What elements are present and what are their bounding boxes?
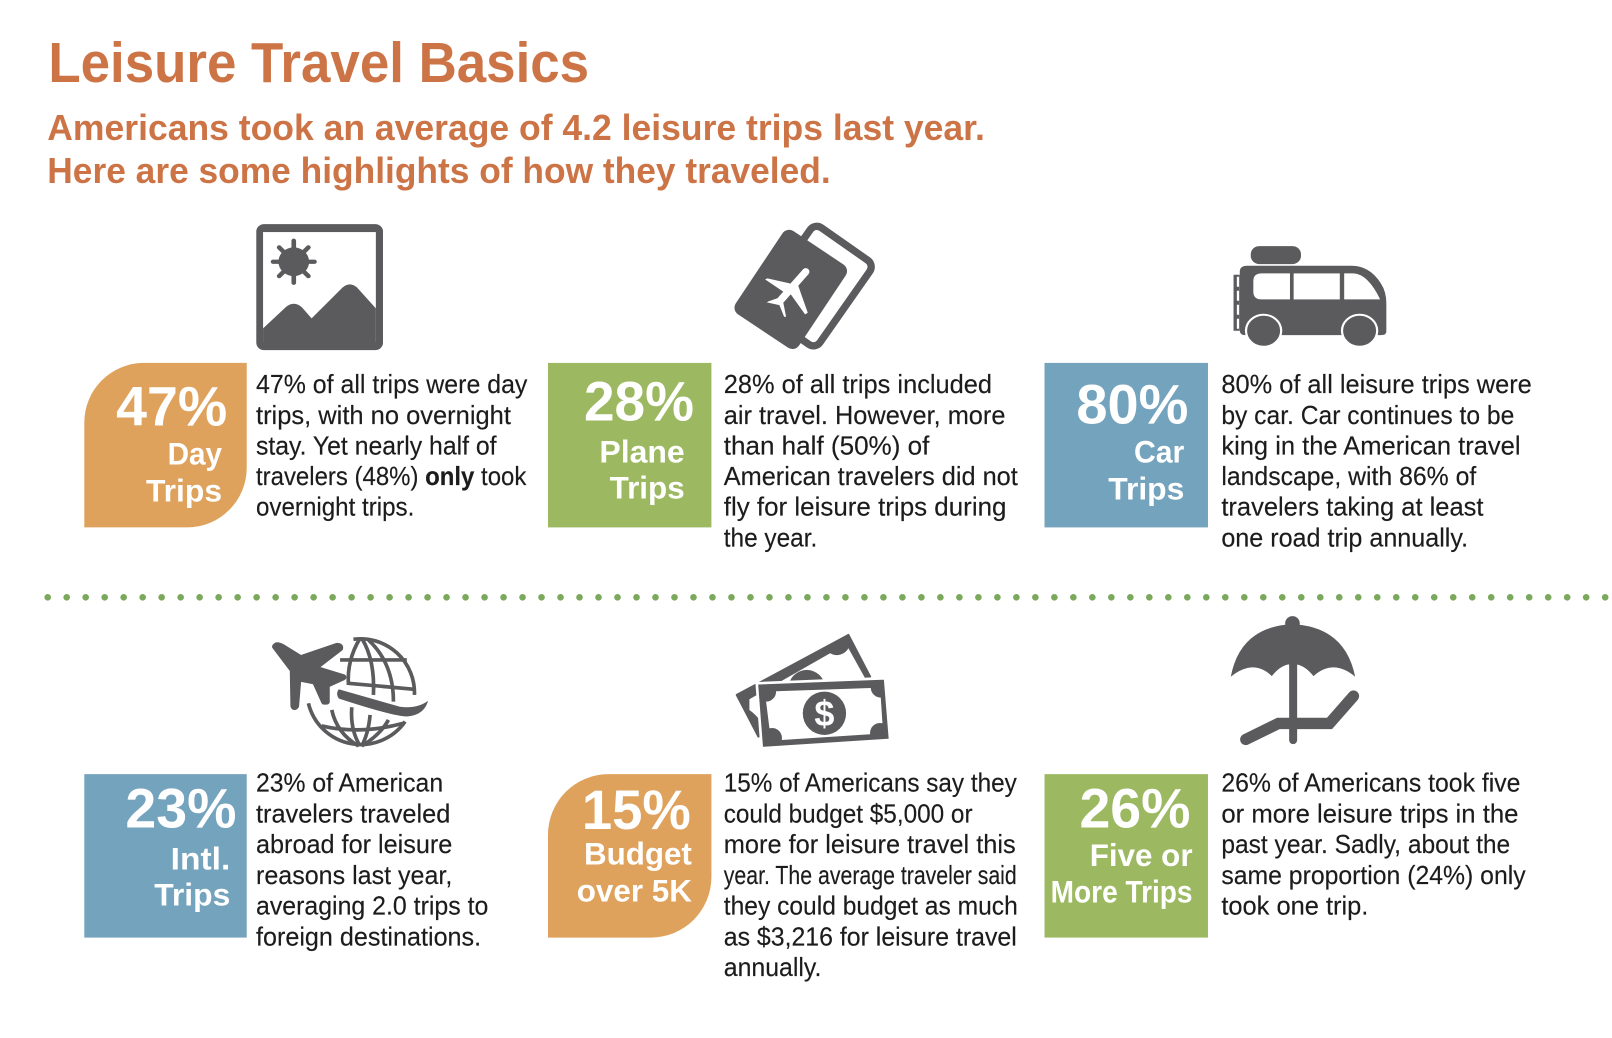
badge: 23% intl. trips (84, 774, 247, 938)
badge: 26% five or more trips: 26% (1079, 778, 1190, 840)
text: day trips description (256, 371, 528, 522)
text: plane trips description (724, 371, 1018, 552)
badge: 47% day trips: Trips (146, 473, 222, 509)
text: plane trips description: fly for leisure trips during (724, 494, 1006, 522)
panel: car trips (1045, 246, 1532, 552)
icon: beach umbrella and lounger (1231, 616, 1355, 740)
icon: van (1234, 246, 1386, 347)
text: day trips description: travelers (48%) only took (256, 463, 527, 491)
text: budget description: could budget $5,000 or (724, 800, 973, 828)
text: plane trips description: than half (50%) of (724, 432, 930, 460)
text: five or more trips description (1221, 770, 1526, 921)
badge: 15% budget over 5K: over 5K (577, 873, 692, 909)
text: car trips description: landscape, with 86% of (1221, 463, 1477, 491)
text: international trips description: 23% of American (256, 770, 443, 798)
text: international trips description: travelers traveled (256, 800, 450, 828)
text: car trips description: travelers taking at least (1221, 494, 1483, 522)
text: five or more trips description: or more leisure trips in the (1221, 800, 1518, 828)
badge: 23% intl. trips: Intl. (171, 841, 230, 877)
badge: 80% car trips: Car (1134, 434, 1184, 470)
text: car trips description: one road trip annually. (1221, 524, 1468, 552)
badge: 26% five or more trips (1045, 774, 1208, 938)
text: car trips description (1221, 371, 1532, 552)
badge: 23% intl. trips: 23% (125, 778, 236, 840)
text: international trips description: abroad for leisure (256, 831, 452, 859)
text: international trips description: foreign destinations. (256, 923, 481, 951)
text: five or more trips description: 26% of Americans took five (1221, 770, 1521, 798)
badge: 23% intl. trips: Trips (154, 877, 230, 913)
panel: five or more trips (1045, 616, 1526, 938)
badge: 15% budget over 5K: Budget (584, 836, 692, 872)
panel: plane trips (548, 223, 1018, 552)
text: five or more trips description: took one trip. (1221, 893, 1368, 921)
text: budget description: they could budget as much (724, 893, 1018, 921)
text: budget description: annually. (724, 954, 821, 982)
subtitle: Americans took an average of 4.2 leisure trips last year. (47, 107, 985, 148)
badge: 28% plane trips: Trips (610, 470, 685, 506)
text: international trips description: reasons last year, (256, 862, 452, 890)
icon: plane and globe (275, 638, 429, 746)
text: plane trips description: the year. (724, 524, 817, 552)
text: budget description (724, 770, 1018, 982)
text: budget description: year. The average traveler said (724, 862, 1017, 890)
text: day trips description: 47% of all trips were day (256, 371, 528, 399)
text: plane trips description: air travel. However, more (724, 402, 1005, 430)
badge: 80% car trips: Trips (1108, 471, 1184, 507)
badge: 80% car trips: 80% (1076, 374, 1188, 436)
text: car trips description: 80% of all leisure trips were (1221, 371, 1532, 399)
text: budget description: as $3,216 for leisure travel (724, 923, 1017, 951)
text: five or more trips description: same proportion (24%) only (1221, 862, 1526, 890)
text: day trips description: overnight trips. (256, 494, 414, 522)
panel: day trips (84, 224, 528, 527)
subtitle: Here are some highlights of how they traveled. (47, 150, 831, 191)
subtitle (47, 107, 985, 191)
text: car trips description: by car. Car continues to be (1221, 402, 1514, 430)
text: car trips description: king in the American travel (1221, 432, 1521, 460)
badge: 15% budget over 5K: 15% (582, 779, 691, 841)
badge: 26% five or more trips: Five or (1090, 837, 1193, 873)
icon: banknotes (737, 635, 890, 748)
badge: 47% day trips: Day (168, 436, 222, 472)
title: Leisure Travel Basics (48, 31, 589, 94)
text: budget description: 15% of Americans say they (724, 770, 1017, 798)
icon: banknotes: $ (814, 693, 834, 734)
badge: 28% plane trips: Plane (599, 434, 685, 470)
text: plane trips description: 28% of all trips included (724, 371, 992, 399)
text: budget description: more for leisure travel this (724, 831, 1016, 859)
badge: 26% five or more trips: More Trips (1051, 874, 1193, 910)
badge: 47% day trips (84, 363, 247, 527)
text: international trips description: averaging 2.0 trips to (256, 893, 488, 921)
badge: 47% day trips: 47% (116, 376, 227, 438)
text: day trips description: trips, with no overnight (256, 402, 511, 430)
panel: international trips (84, 638, 488, 951)
icon: picture with sun and mountains (256, 224, 383, 350)
panel: budget (548, 635, 1018, 982)
badge: 28% plane trips: 28% (584, 370, 694, 432)
badge: 80% car trips (1045, 363, 1208, 527)
badge: 28% plane trips (548, 363, 711, 527)
text: plane trips description: American travelers did not (724, 463, 1018, 491)
icon: boarding passes with plane (731, 223, 874, 352)
badge: 15% budget over 5K (548, 774, 711, 938)
text: international trips description (256, 770, 488, 951)
text: day trips description: stay. Yet nearly half of (256, 432, 497, 460)
text: five or more trips description: past year. Sadly, about the (1221, 831, 1510, 859)
